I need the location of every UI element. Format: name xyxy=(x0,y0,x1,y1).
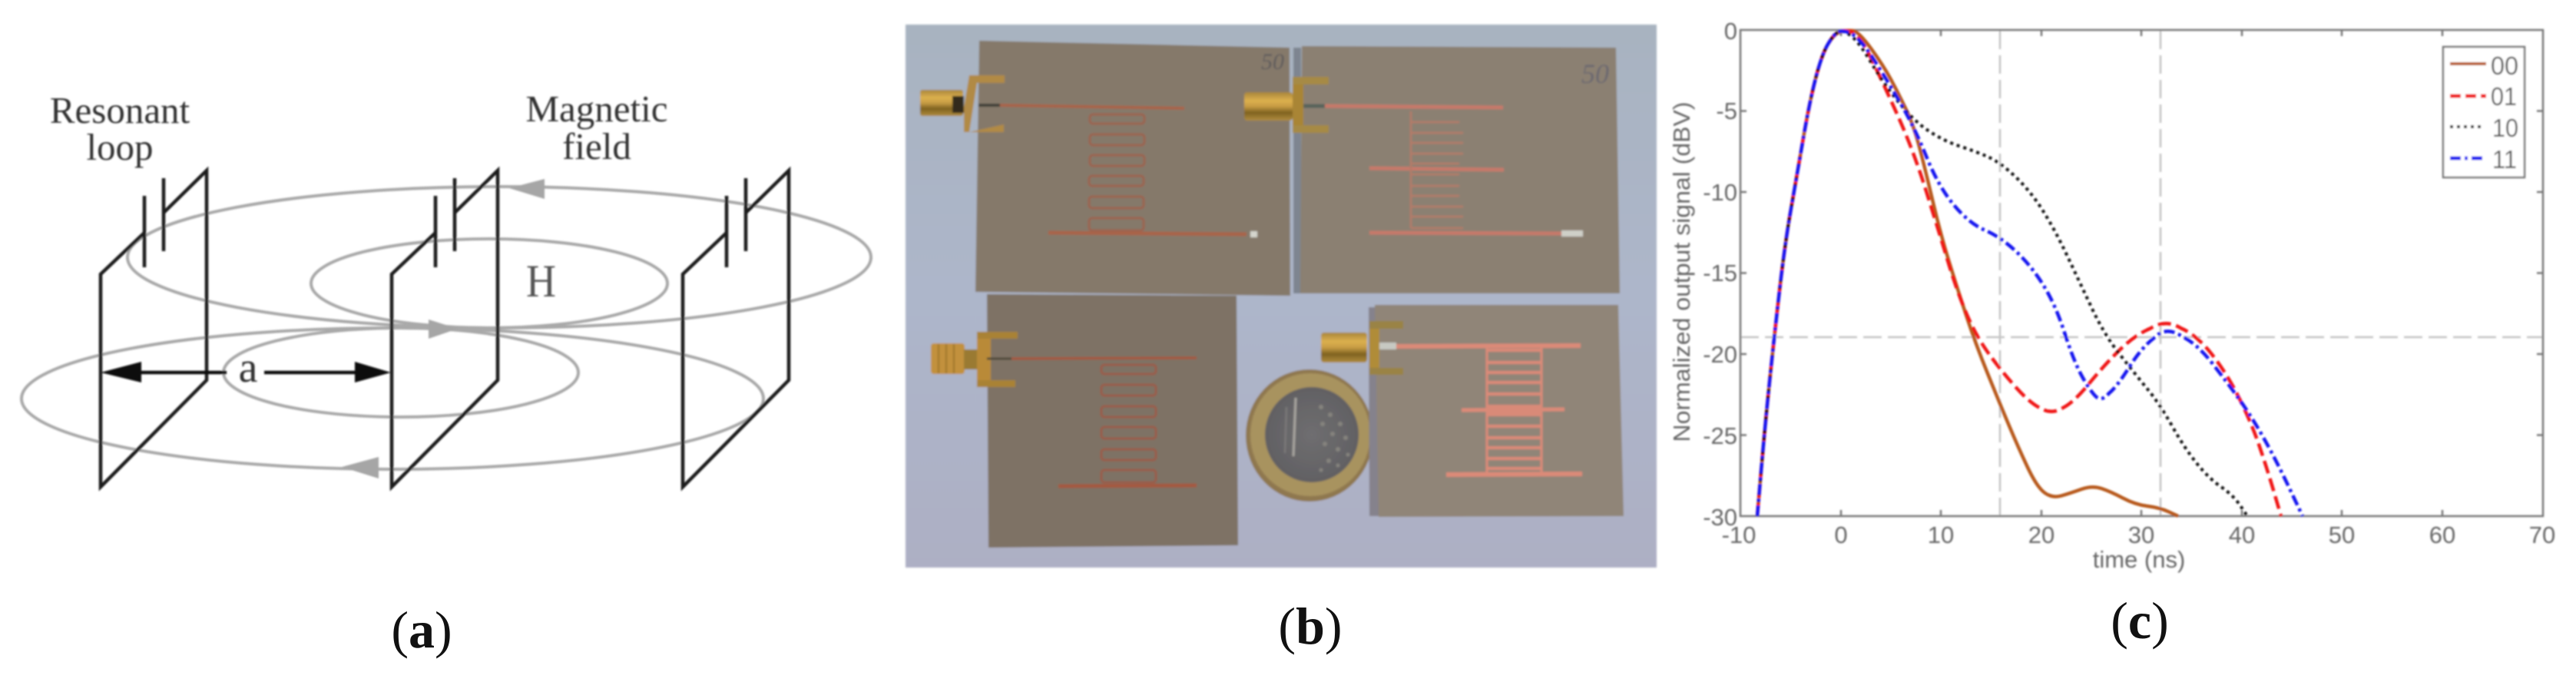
y axis tick labels: -10 xyxy=(1703,179,1737,206)
x axis tick labels xyxy=(1722,521,2555,548)
label a: a xyxy=(239,344,258,392)
handwritten mark: 50 xyxy=(1261,49,1284,74)
magnetic field loops xyxy=(22,187,871,469)
resonant loop 1 xyxy=(101,170,207,487)
y axis title: Normalized output signal (dBV) xyxy=(1668,101,1695,442)
x axis tick labels: 70 xyxy=(2529,521,2555,548)
resonant loop 2 xyxy=(392,170,498,487)
legend xyxy=(2443,47,2525,177)
panel b: photo of tag prototypes xyxy=(906,25,1657,568)
panel c: output signal chart xyxy=(1668,18,2555,573)
x axis tick labels: 40 xyxy=(2229,521,2255,548)
x axis tick labels: 10 xyxy=(1928,521,1954,548)
label Resonant loop: loop xyxy=(86,126,154,168)
legend: 11 xyxy=(2492,145,2517,174)
y axis tick labels: 0 xyxy=(1724,18,1737,45)
board 2 xyxy=(1244,46,1620,293)
x axis tick labels: 50 xyxy=(2329,521,2355,548)
label Resonant loop: Resonant xyxy=(50,89,190,131)
y axis tick labels: -15 xyxy=(1703,260,1737,286)
y axis tick labels: -30 xyxy=(1703,504,1737,531)
legend: 10 xyxy=(2492,114,2518,142)
reference dashed lines xyxy=(1740,31,2543,516)
label H: H xyxy=(526,256,556,306)
x axis tick labels: 30 xyxy=(2128,521,2154,548)
x axis tick labels: 0 xyxy=(1834,521,1848,548)
label Magnetic field: Magnetic xyxy=(525,88,668,130)
y axis tick labels: -5 xyxy=(1716,98,1737,124)
panel a: resonant loops diagram xyxy=(22,88,871,487)
spacing arrow a xyxy=(101,362,391,382)
board 4 xyxy=(1321,305,1624,517)
x axis tick labels: -10 xyxy=(1722,521,1756,548)
board 3 xyxy=(931,294,1238,548)
curve 01 xyxy=(1757,31,2281,516)
euro coin xyxy=(1246,369,1373,502)
handwritten mark: 50 xyxy=(1581,58,1609,89)
curve 10 xyxy=(1757,31,2247,516)
caption c: (c) xyxy=(2111,591,2169,650)
axes frame and ticks xyxy=(1740,30,2543,516)
legend: 01 xyxy=(2491,82,2517,111)
y axis tick labels: -20 xyxy=(1703,341,1737,368)
x axis tick labels: 60 xyxy=(2429,521,2455,548)
label Magnetic field: field xyxy=(562,125,631,167)
caption b: (b) xyxy=(1278,597,1343,655)
caption a: (a) xyxy=(391,601,452,659)
curve 00 xyxy=(1757,31,2178,516)
y axis tick labels: -25 xyxy=(1703,422,1737,449)
x axis title: time (ns) xyxy=(2093,546,2185,573)
board 1 xyxy=(920,41,1290,296)
resonant loop 3 xyxy=(683,170,789,487)
x axis tick labels: 20 xyxy=(2028,521,2055,548)
field direction arrows xyxy=(342,179,545,478)
curve 11 xyxy=(1757,31,2303,516)
y axis tick labels xyxy=(1703,18,1737,531)
photo background xyxy=(906,25,1657,568)
legend: 00 xyxy=(2491,51,2518,80)
